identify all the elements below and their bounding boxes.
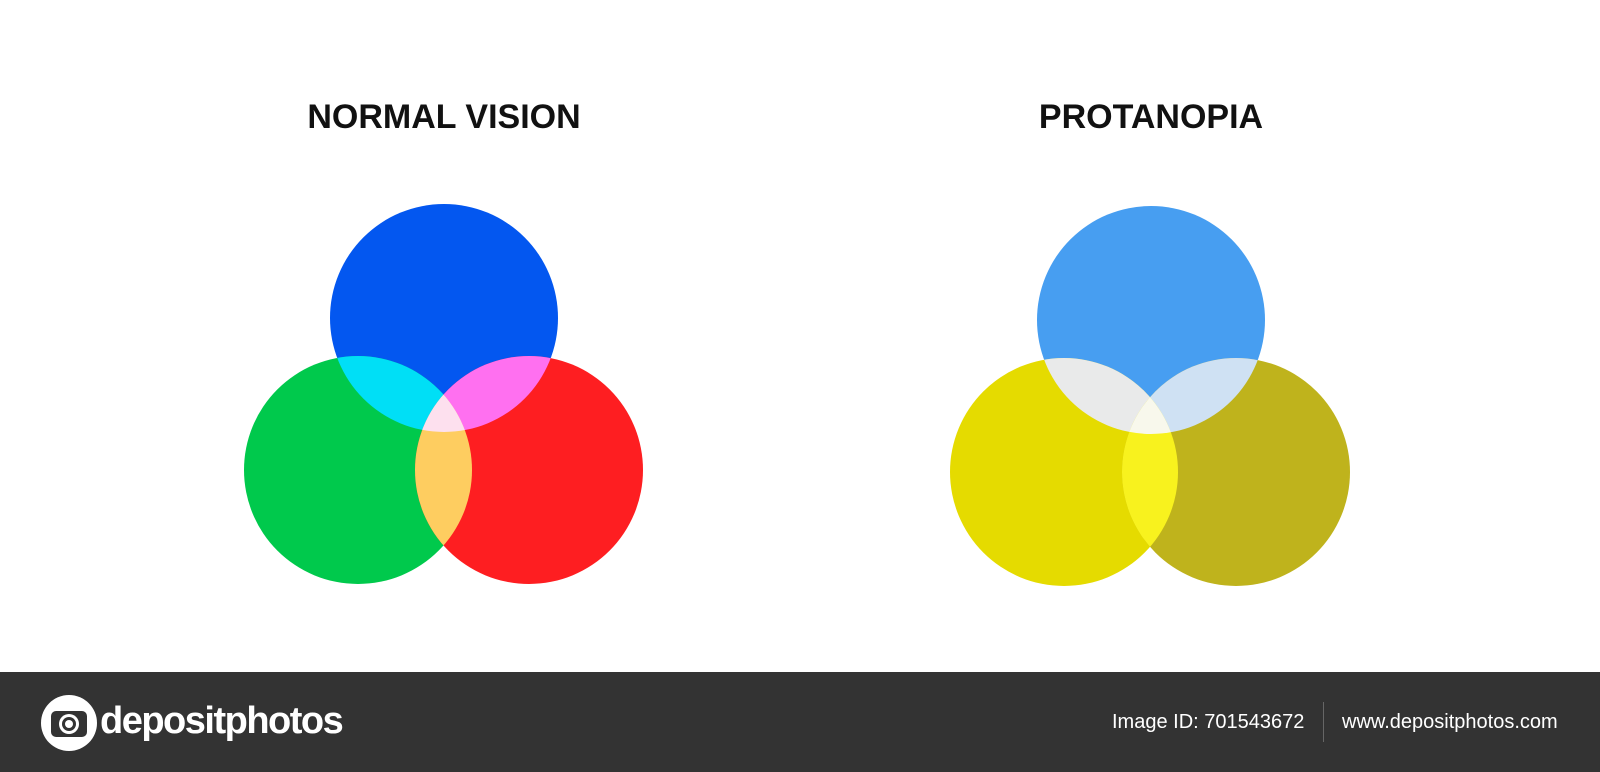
icon: camera logo [41,695,97,751]
logo text: depositphotos [100,700,342,742]
venn: protanopia [950,206,1350,586]
footer bar [0,672,1600,772]
venn: normal vision [244,204,643,584]
diagrams [244,204,1350,586]
title: normal vision: NORMAL VISION [307,98,581,136]
image id: Image ID: 701543672 [1112,711,1304,733]
title: protanopia: PROTANOPIA [1039,98,1263,136]
website url: www.depositphotos.com [1342,711,1558,733]
